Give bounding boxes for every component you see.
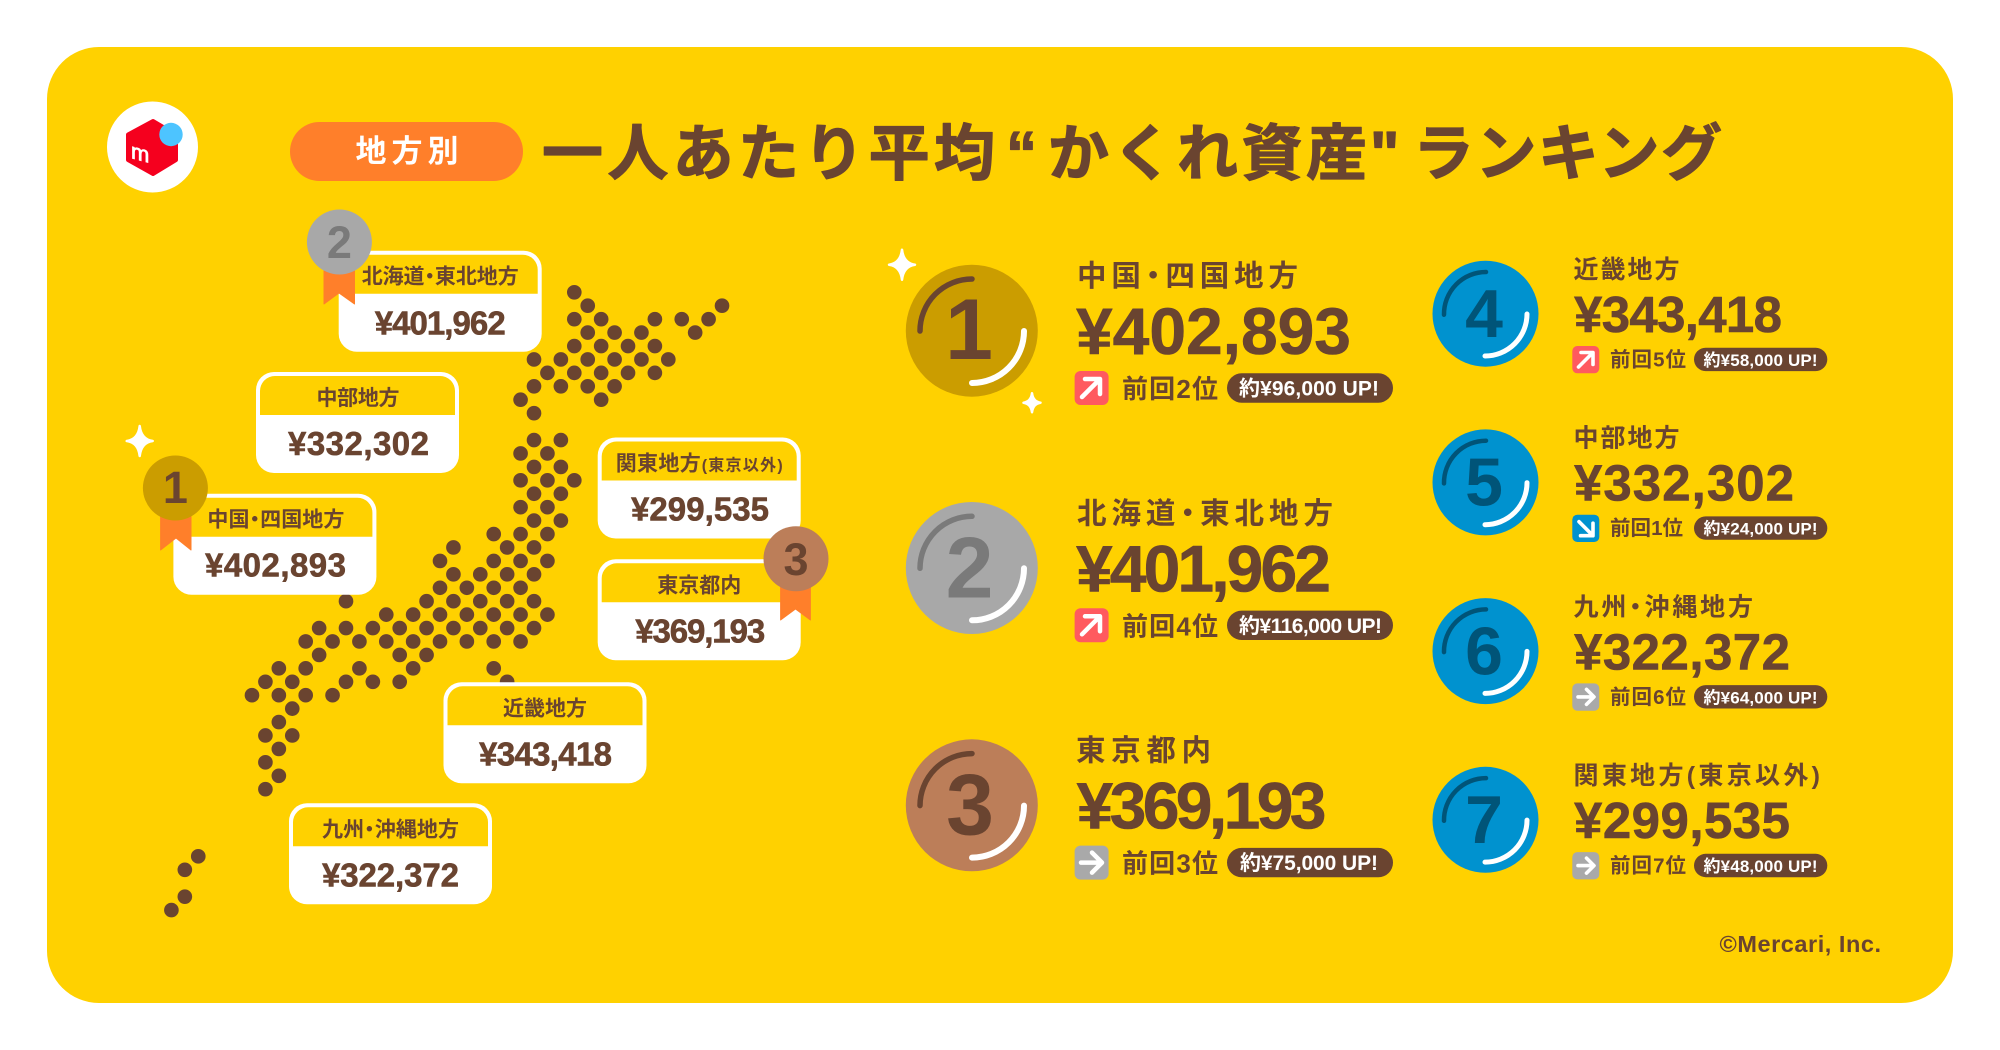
rank 6: 九州・沖縄地方 [1432,593,1827,711]
map card: 北海道・東北地方: ¥401,962 [375,305,506,342]
rank 2: 北海道・東北地方 [906,497,1393,642]
rank 7: 関東地方（東京以外）: 関東地方(東京以外) [1574,762,1820,790]
map card: 九州・沖縄地方 [289,803,492,904]
rank 7: 関東地方（東京以外）: 7 [1465,782,1503,858]
title: “ [1006,120,1037,189]
logo: mercari [107,102,198,192]
title: 一人あたり平均 [542,120,995,188]
rank 1: 中国・四国地方 [906,260,1393,405]
map card: 中部地方: 中部地方 [316,387,400,410]
rank 1: 中国・四国地方: 前回2位 [1122,374,1218,404]
rank 4: 近畿地方 [1432,256,1827,373]
sparkle: ranking large [889,250,915,280]
rank 5: 中部地方: 中部地方 [1574,425,1680,453]
rank 4: 近畿地方: 前回5位 [1610,348,1686,372]
rank 7: 関東地方（東京以外）: 前回7位 [1610,855,1686,878]
map card: 北海道・東北地方 [339,251,542,352]
logo: mercari: m [131,138,149,168]
map card: 東京都内: ¥369,193 [635,612,765,649]
rank 1: 中国・四国地方: 1 [945,282,993,378]
rank 7: 関東地方（東京以外）: ¥299,535 [1574,792,1790,849]
rank 3: 東京都内: 前回3位 [1122,849,1218,879]
map card: 中部地方 [256,372,459,473]
map card: 関東地方（東京以外）: (東京以外) [702,456,783,474]
map card: 関東地方（東京以外）: 関東地方 [616,452,701,476]
map medal 2: 2 [327,217,352,268]
map card: 近畿地方: 近畿地方 [503,697,587,720]
sparkle: map medal [127,426,153,456]
map medal 3 [764,526,828,620]
map card: 中国・四国地方: 中国・四国地方 [207,509,344,532]
rank 6: 九州・沖縄地方: ¥322,372 [1574,623,1790,680]
map card: 近畿地方 [444,682,646,783]
map card: 中部地方: ¥332,302 [288,425,429,462]
map card: 九州・沖縄地方: 九州・沖縄地方 [322,818,459,841]
title: かくれ資産 [1048,120,1367,188]
map card: 関東地方（東京以外）: ¥299,535 [631,490,769,528]
map medal 2 [307,210,372,304]
map medal 1: 1 [163,462,188,513]
rank 4: 近畿地方: 約¥58,000 UP! [1704,351,1818,370]
title [542,120,1722,189]
map card: 中国・四国地方: ¥402,893 [205,547,346,584]
heading tag: 地方別 [290,122,523,181]
map card: 近畿地方: ¥343,418 [479,735,612,772]
heading tag: 地方別: 地方別 [356,134,458,169]
rank 5: 中部地方: ¥332,302 [1574,455,1794,512]
map card: 東京都内: 東京都内 [657,574,741,597]
rank 3: 東京都内: 東京都内 [1076,735,1211,768]
rank 1: 中国・四国地方: 中国・四国地方 [1077,260,1298,293]
rank 6: 九州・沖縄地方: 前回6位 [1610,686,1686,709]
rank 3: 東京都内: 3 [946,758,994,854]
map card: 中国・四国地方 [173,494,376,595]
rank 6: 九州・沖縄地方: 約¥64,000 UP! [1704,688,1818,707]
map card: 関東地方（東京以外） [598,438,801,538]
rank 1: 中国・四国地方: ¥402,893 [1076,294,1351,368]
dot map of Japan [164,285,729,917]
title: " [1370,120,1399,189]
rank 2: 北海道・東北地方: 北海道・東北地方 [1077,497,1333,530]
rank 5: 中部地方: 約¥24,000 UP! [1704,520,1818,539]
map medal 1 [143,456,208,550]
rank 3: 東京都内: 約¥75,000 UP! [1240,852,1378,875]
rank 5: 中部地方: 前回1位 [1610,517,1683,540]
map card: 九州・沖縄地方: ¥322,372 [322,856,459,893]
rank 6: 九州・沖縄地方: 九州・沖縄地方 [1574,593,1753,621]
rank 2: 北海道・東北地方: ¥401,962 [1076,531,1331,605]
rank 7: 関東地方（東京以外）: 約¥48,000 UP! [1704,857,1818,876]
rank 3: 東京都内 [906,735,1393,880]
rank 2: 北海道・東北地方: 前回4位 [1122,611,1218,641]
rank 2: 北海道・東北地方: 約¥116,000 UP! [1239,615,1382,638]
rank 6: 九州・沖縄地方: 6 [1465,613,1503,689]
copyright: ©Mercari, Inc. [1720,931,1881,957]
rank 5: 中部地方 [1432,425,1827,542]
map card: 東京都内 [598,559,801,660]
map medal 3: 3 [783,534,809,585]
rank 7: 関東地方（東京以外） [1432,762,1827,879]
rank 4: 近畿地方: 4 [1465,276,1503,352]
rank 4: 近畿地方: ¥343,418 [1574,286,1782,343]
title: ランキング [1413,120,1722,188]
map card: 北海道・東北地方: 北海道・東北地方 [362,266,519,289]
sparkle: ranking small [1024,393,1040,412]
rank 5: 中部地方: 5 [1465,445,1503,521]
rank 1: 中国・四国地方: 約¥96,000 UP! [1239,378,1379,400]
rank 2: 北海道・東北地方: 2 [946,520,993,616]
rank 4: 近畿地方: 近畿地方 [1574,256,1680,284]
rank 3: 東京都内: ¥369,193 [1076,769,1326,843]
